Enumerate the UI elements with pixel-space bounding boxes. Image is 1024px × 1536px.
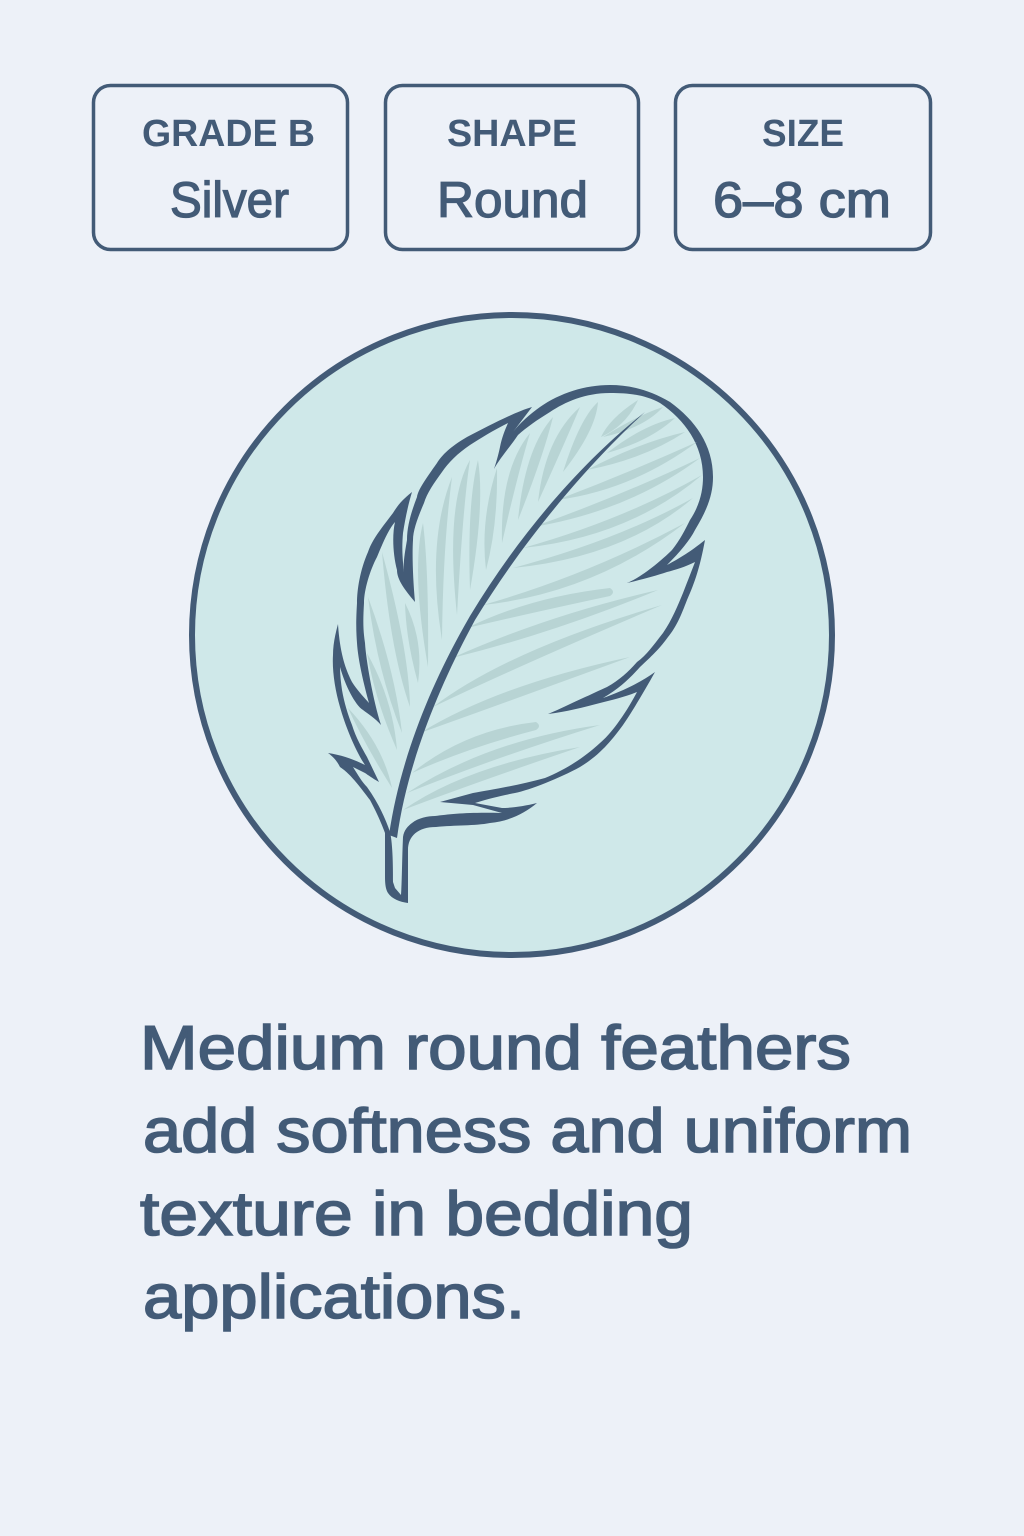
feather barbs bbox=[348, 400, 702, 810]
description text: applications. bbox=[143, 1263, 525, 1332]
feather interior bbox=[340, 393, 703, 895]
feather silhouette outline bbox=[328, 385, 713, 903]
badge: shape bbox=[386, 86, 638, 250]
description text: add softness and uniform bbox=[143, 1097, 912, 1166]
description text: texture in bedding bbox=[140, 1180, 693, 1249]
circle background bbox=[192, 315, 832, 955]
description text: Medium round feathers bbox=[140, 1014, 851, 1083]
icon: feather in circle bbox=[192, 315, 832, 955]
badge value: size: 6–8 cm bbox=[713, 172, 891, 228]
badge value: grade: Silver bbox=[170, 172, 289, 228]
description text bbox=[140, 1014, 912, 1332]
feather rachis bbox=[389, 412, 645, 838]
badge value: shape: Round bbox=[437, 172, 588, 228]
badge: grade bbox=[94, 86, 348, 250]
badge label: size: SIZE bbox=[762, 113, 844, 155]
badge label: grade: GRADE B bbox=[142, 113, 315, 155]
badge label: shape: SHAPE bbox=[447, 113, 577, 155]
badge: size bbox=[676, 86, 930, 250]
